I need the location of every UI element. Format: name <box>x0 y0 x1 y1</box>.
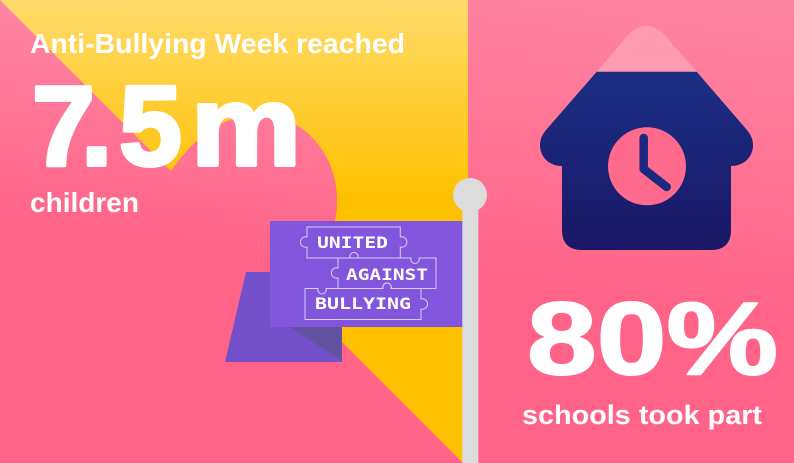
label: schools took part: schools took part <box>522 400 762 430</box>
big number: 7.5m <box>32 63 301 189</box>
big number: 80%: 80% <box>527 281 778 396</box>
flag front <box>270 221 463 327</box>
label: children: children <box>30 187 139 218</box>
puzzle piece: United: UNITED <box>317 233 388 252</box>
clock hands <box>644 138 667 187</box>
icon: school house with clock <box>540 26 753 250</box>
clock face <box>608 127 686 205</box>
big number: 7.5m: m <box>191 63 301 189</box>
flag pole <box>453 178 487 463</box>
puzzle slogan <box>300 227 436 320</box>
big number: 7.5m: 7.5 <box>32 63 182 189</box>
puzzle piece: Against: AGAINST <box>346 265 428 284</box>
yellow triangle <box>0 0 468 463</box>
flag fold shadow <box>290 327 342 361</box>
house body <box>540 72 753 250</box>
panel: right background <box>468 0 794 463</box>
heading: Anti-Bullying Week reached: Anti-Bullying Week reached <box>30 28 405 59</box>
panel: left background <box>0 0 468 463</box>
puzzle piece: Bullying: BULLYING <box>315 294 411 313</box>
pink blob <box>120 114 342 342</box>
roof tip <box>597 26 697 72</box>
flag back fold <box>225 272 342 362</box>
flag <box>225 221 463 362</box>
